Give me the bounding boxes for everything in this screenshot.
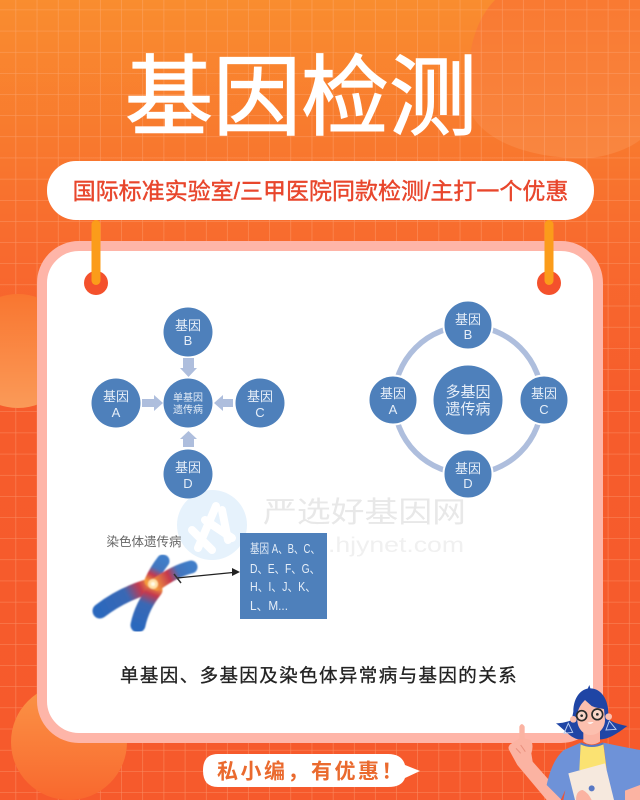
node: gene C: 基因 [531, 386, 557, 401]
node: gene C: C [539, 402, 549, 417]
node: gene D: 基因 [455, 461, 481, 476]
speech bubble: 私小编，有优惠！ [217, 760, 405, 784]
ears [570, 716, 577, 723]
caption: 单基因、多基因及染色体异常病与基因的关系 [120, 665, 518, 686]
node: gene A: A [112, 405, 121, 420]
arm and pointing hand [508, 724, 567, 800]
diagram: polygenic disease [368, 300, 568, 498]
node: gene D: D [183, 476, 193, 491]
watermark: .hjynet.com [328, 534, 464, 557]
gene list box: D、E、F、G、 [250, 562, 320, 576]
node: gene C [236, 378, 284, 428]
watermark [177, 490, 466, 560]
node: gene A: 基因 [380, 386, 406, 401]
hair [556, 688, 627, 739]
hands on tablet [576, 790, 592, 800]
left connector pin [84, 220, 108, 295]
node: gene D: D [463, 476, 473, 491]
node: gene B [164, 308, 212, 356]
neck [583, 728, 600, 744]
main panel [37, 241, 603, 743]
chromosome label: 染色体遗传病 [106, 534, 182, 549]
node: gene B: B [464, 327, 472, 342]
double arrow [174, 568, 240, 583]
node: polygenic center: 多基因 [445, 384, 491, 401]
node: gene D [164, 450, 212, 498]
chromosome [100, 561, 191, 625]
face [577, 700, 605, 735]
gene list box: L、M... [250, 599, 288, 613]
node: gene C: 基因 [247, 389, 273, 404]
node: gene B: B [184, 333, 192, 348]
right connector pin [537, 220, 561, 295]
speech bubble [203, 754, 420, 787]
gene list box [240, 533, 327, 619]
jacket [547, 743, 640, 800]
tablet [568, 763, 614, 800]
node: gene A: 基因 [103, 389, 129, 404]
smile [587, 722, 594, 724]
node: single-gene center: 单基因 [173, 391, 203, 404]
watermark: 严选好基因网 [263, 496, 466, 529]
node: gene B: 基因 [455, 312, 481, 327]
node: gene B: 基因 [175, 318, 201, 333]
node: gene D: 基因 [175, 460, 201, 475]
node: gene D [444, 450, 492, 498]
node: gene A: A [389, 402, 398, 417]
diagram: single-gene disease [92, 308, 284, 498]
node: gene A [92, 378, 140, 428]
gene list box: 基因 A、B、C、 [250, 542, 320, 556]
node: single-gene center [164, 378, 212, 428]
character illustration [508, 685, 640, 800]
earrings [564, 721, 616, 733]
subtitle pill [47, 161, 594, 220]
title: 基因检测 [125, 48, 477, 147]
node: gene C: C [255, 405, 265, 420]
node: polygenic center: 遗传病 [445, 401, 491, 418]
node: gene C [520, 376, 568, 424]
node: polygenic center [434, 366, 502, 434]
glasses [577, 709, 603, 721]
gene list box: H、I、J、K、 [250, 580, 316, 594]
node: gene B [444, 300, 492, 350]
yellow shirt [579, 744, 607, 770]
subtitle pill: 国际标准实验室/三甲医院同款检测/主打一个优惠 [73, 178, 568, 204]
node: single-gene center: 遗传病 [173, 403, 203, 416]
node: gene A [368, 376, 418, 424]
